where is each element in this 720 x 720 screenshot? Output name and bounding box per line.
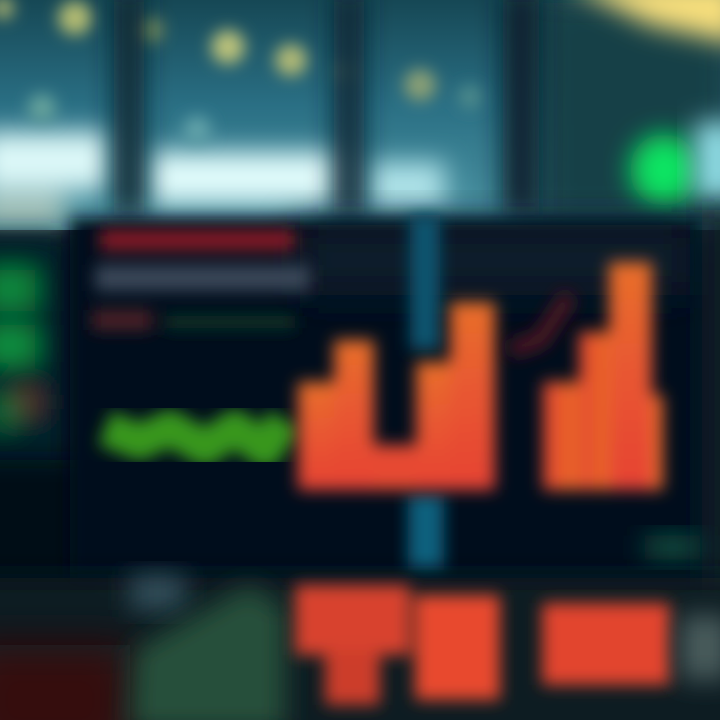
ceiling lights <box>0 0 482 144</box>
left side screen <box>0 235 65 475</box>
upper background: windows and ceiling <box>0 0 720 230</box>
green line chart <box>105 420 285 450</box>
right bar reflection <box>542 603 670 685</box>
panel upper tint <box>300 225 690 295</box>
pale grey reflection <box>130 575 185 610</box>
main dark display panel <box>70 218 702 578</box>
green glow sign <box>630 122 720 206</box>
right orange bar chart <box>543 262 663 490</box>
reflective table surface <box>0 578 720 720</box>
dark vertical columns <box>114 0 539 215</box>
left orange bar chart <box>298 302 495 490</box>
yellow ceiling light strip <box>560 0 720 45</box>
small green label <box>645 535 700 560</box>
right edge of the scene <box>702 210 720 610</box>
blue central column <box>408 215 444 570</box>
lower left dark block <box>0 460 115 630</box>
left bar reflection <box>295 585 500 705</box>
blurred heading lines <box>92 230 310 330</box>
green reflection <box>130 585 285 720</box>
bright white window band <box>0 132 445 227</box>
red floor glow <box>0 645 130 720</box>
dark red trend line <box>510 295 570 350</box>
right grey reflection <box>680 615 720 680</box>
